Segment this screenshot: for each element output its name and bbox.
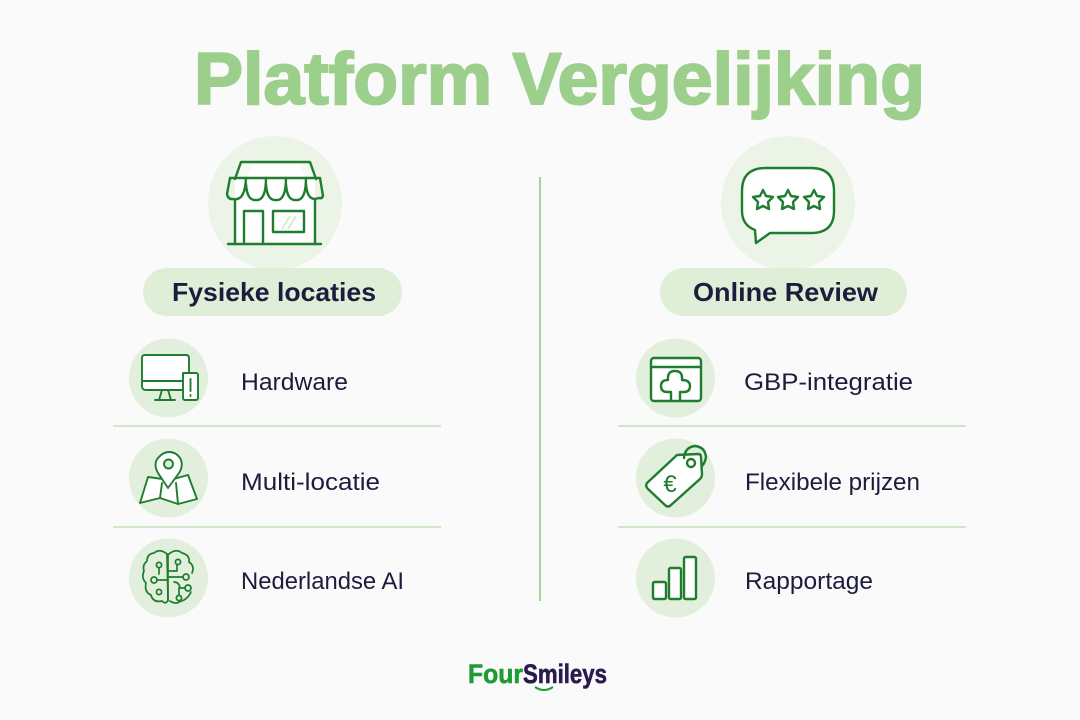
- label: Flexibele prijzen: [745, 469, 920, 496]
- row: flexibele prijzen: [636, 438, 920, 518]
- logo: FourSmileys: Smileys: [523, 659, 607, 689]
- panel: fysieke locaties: [113, 136, 441, 618]
- icon: monitor and phone: [142, 355, 198, 400]
- row: hardware: [129, 338, 348, 418]
- row: rapportage: [636, 538, 873, 618]
- label: GBP-integratie: [744, 369, 913, 396]
- icon: storefront: [208, 136, 342, 270]
- heading pill: online review: Online Review: [693, 277, 879, 307]
- label: Rapportage: [745, 568, 873, 595]
- heading pill: fysieke locaties: Fysieke locaties: [172, 277, 376, 307]
- icon: euro price tag: €: [663, 471, 677, 498]
- row: nederlandse ai: [129, 538, 404, 618]
- row: multi-locatie: [129, 438, 380, 518]
- label: Nederlandse AI: [241, 568, 404, 595]
- panel: online review: [618, 136, 966, 618]
- icon: brain circuit: [143, 551, 193, 603]
- heading pill: fysieke locaties: [143, 268, 402, 316]
- heading pill: online review: [660, 268, 907, 316]
- title: Platform Vergelijking: [194, 39, 925, 120]
- icon: euro price tag: [646, 446, 706, 506]
- icon: browser with clover: [651, 358, 701, 401]
- row: gbp-integratie: [636, 338, 913, 418]
- label: Hardware: [241, 369, 348, 396]
- center divider: [539, 177, 541, 601]
- label: Multi-locatie: [241, 469, 380, 496]
- logo: FourSmileys: Four: [468, 659, 523, 689]
- icon: map with pin: [140, 452, 197, 504]
- icon: speech bubble with stars: [721, 136, 855, 270]
- icon: bar chart: [653, 557, 696, 599]
- logo: FourSmileys: [468, 659, 607, 690]
